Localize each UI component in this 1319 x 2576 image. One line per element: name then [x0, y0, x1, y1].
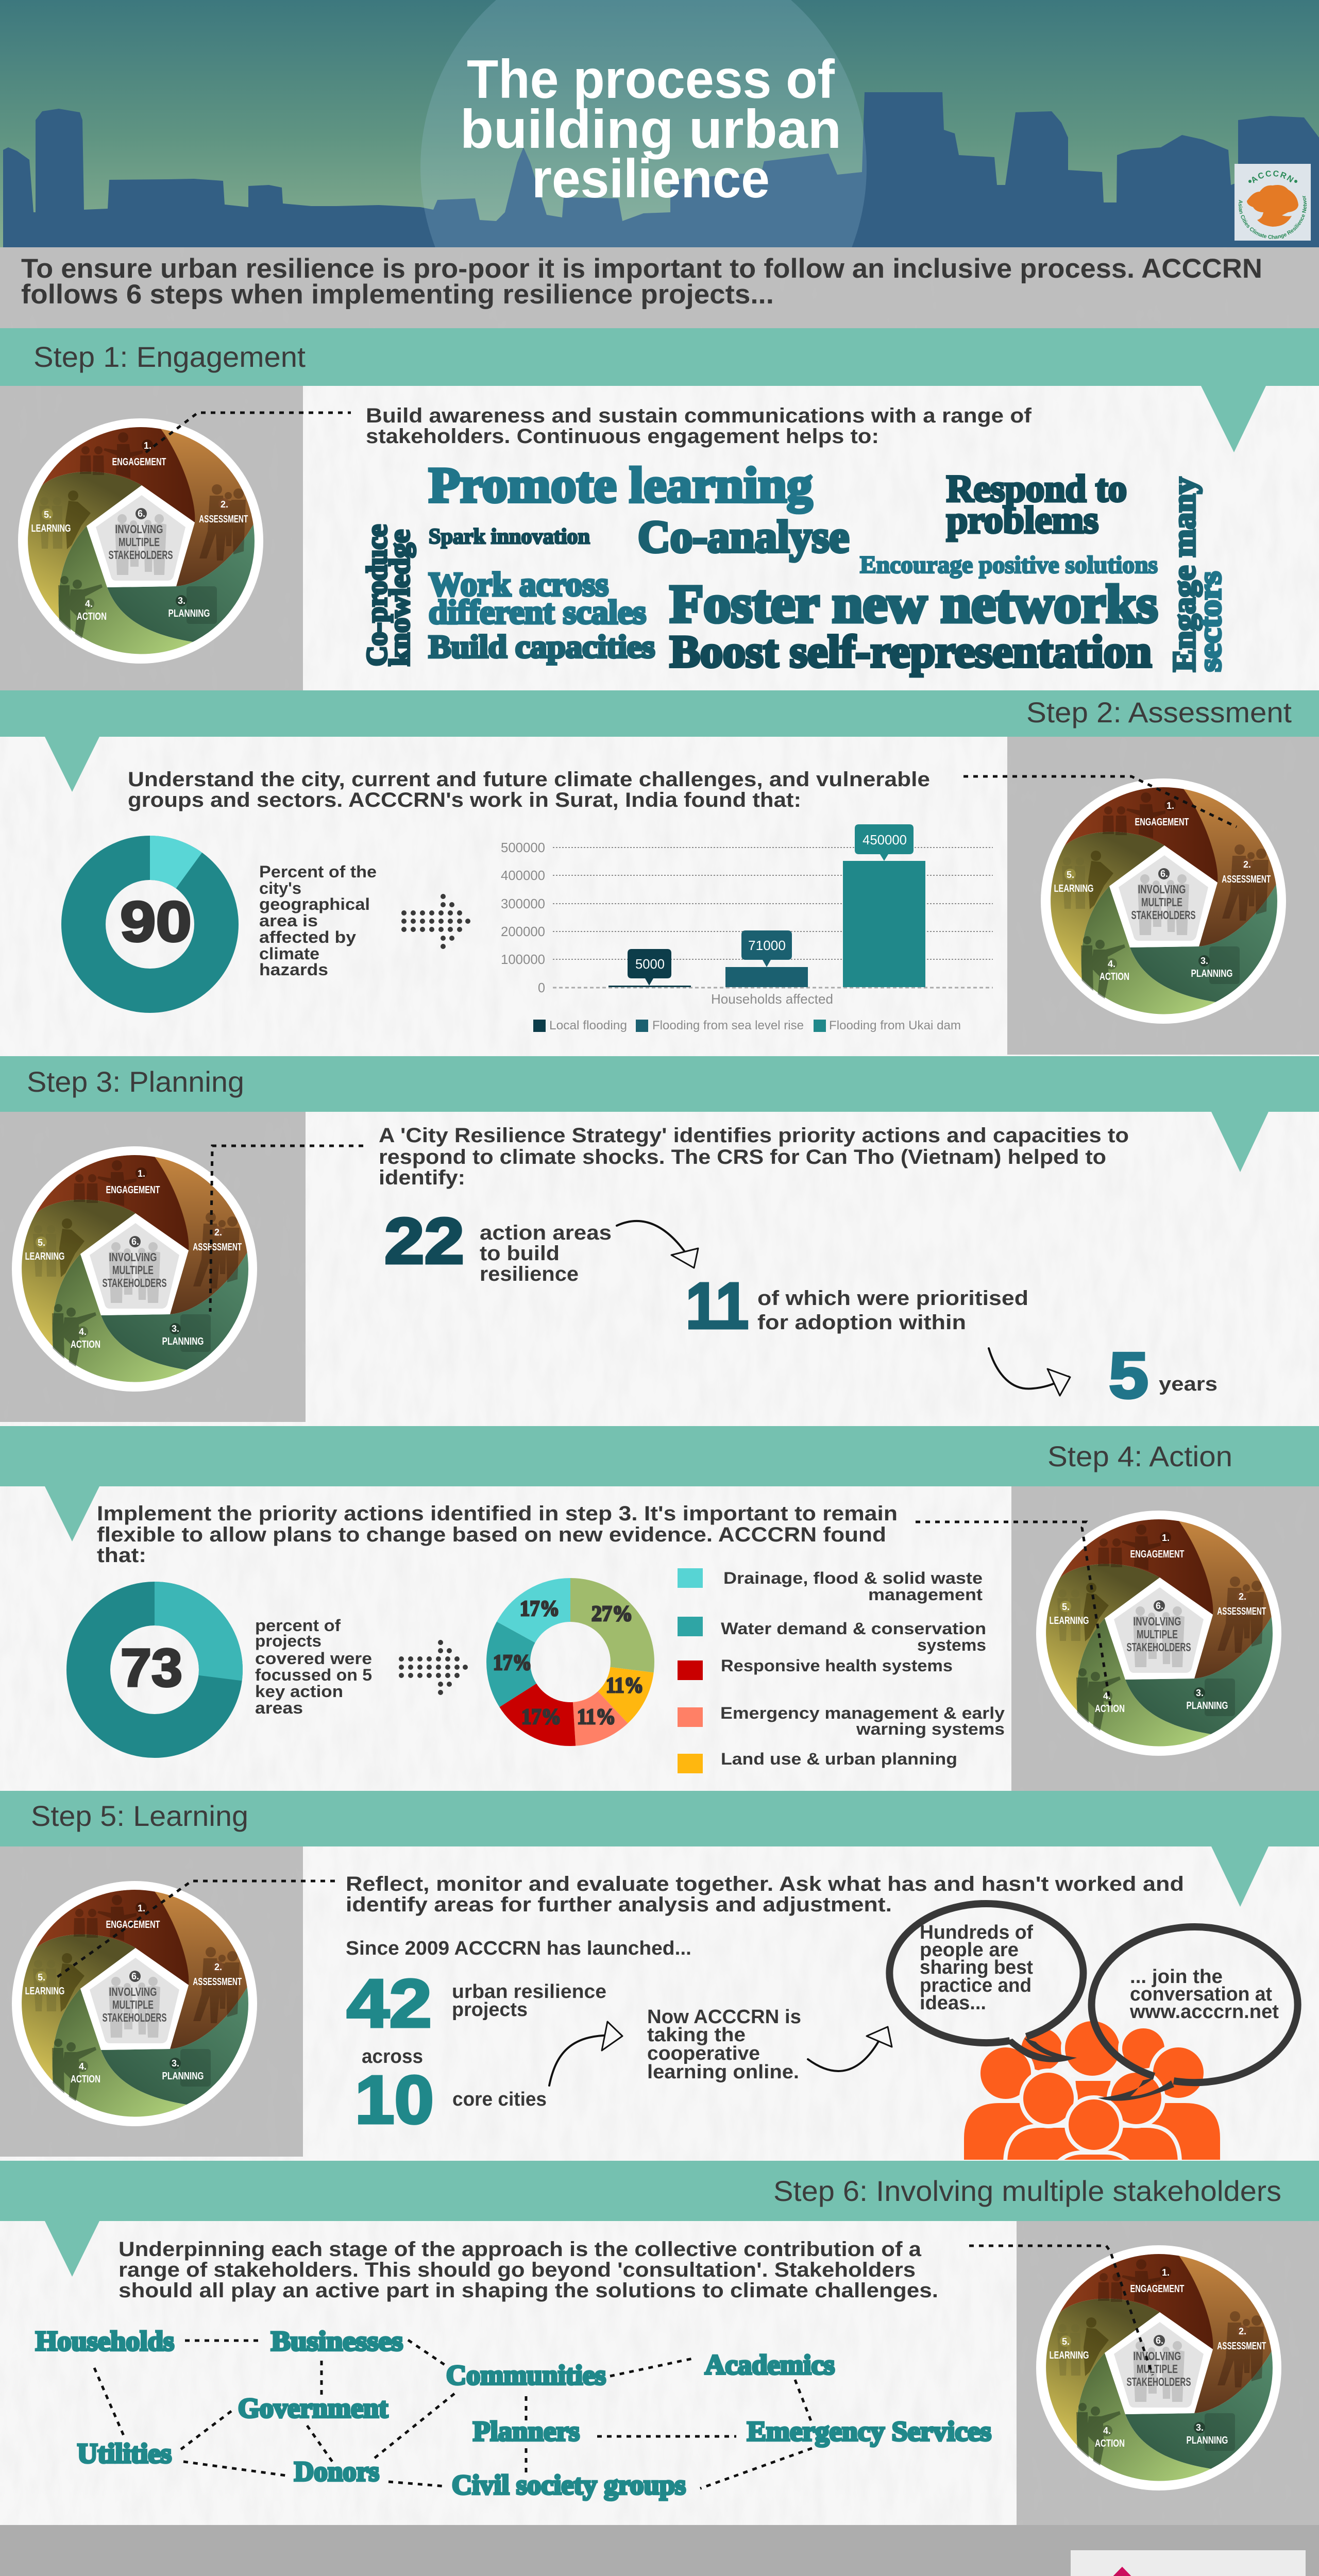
stakeholder labels: Households	[36, 2326, 174, 2357]
step 2 wheel: 5.	[1067, 870, 1074, 880]
step 3 description: identify:	[379, 1166, 465, 1189]
step 3 wheel: ACTION	[71, 1339, 100, 1350]
step 2 heading: Step 2: Assessment	[1026, 696, 1292, 728]
word cloud: problems	[946, 499, 1098, 541]
step 5 wheel: 6.	[131, 1971, 139, 1981]
donut legend: management	[868, 1585, 983, 1604]
step 2 description	[128, 768, 930, 811]
bar chart: households affected	[501, 824, 993, 1032]
speech bubble: join: conversation at	[1130, 1984, 1272, 2005]
step 6 wheel: ENGAGEMENT	[1130, 2283, 1184, 2295]
step 2 wheel: ACTION	[1100, 971, 1129, 982]
stat: 11 prioritised: 11	[686, 1269, 749, 1342]
word cloud: Boost self-representation	[670, 627, 1152, 677]
online learning text	[647, 2006, 801, 2083]
tooltip 71000: 71000	[748, 938, 786, 953]
step 6 wheel: 2.	[1239, 2326, 1246, 2336]
step 5 wheel: ACTION	[71, 2074, 100, 2085]
title: building urban	[460, 99, 841, 160]
step 6 wheel: MULTIPLE	[1137, 2362, 1178, 2376]
step 1 band	[0, 328, 1319, 386]
step 5 wheel: ENGAGEMENT	[106, 1919, 160, 1930]
stat: 10 core cities: core cities	[452, 2089, 547, 2110]
stat: 42 projects: urban resilience	[452, 1981, 606, 2003]
step 4 wheel: 5.	[1062, 1602, 1070, 1612]
step 1 wheel: 3.	[178, 596, 185, 606]
word cloud: Promote learning	[429, 457, 813, 513]
step 1 pointer	[1201, 386, 1266, 452]
tooltip 5000: 5000	[635, 956, 665, 972]
donut legend: Land use & urban planning	[721, 1750, 957, 1768]
word cloud: Spark innovation	[429, 525, 590, 549]
donut caption: hazards	[259, 960, 328, 979]
step 2 connector	[963, 776, 1237, 827]
donut caption: focussed on 5	[255, 1666, 372, 1684]
arrow: cities to online	[549, 2022, 622, 2086]
word cloud: Encourage positive solutions	[860, 551, 1158, 579]
chart legend: Flooding from Ukai dam	[829, 1019, 961, 1032]
logo: ACCCRN	[1235, 164, 1311, 241]
stat: 42 projects: projects	[452, 1999, 528, 2021]
step 2 wheel	[1041, 778, 1286, 1024]
step 3 wheel: 2.	[214, 1227, 222, 1238]
step 2 wheel: 3.	[1200, 956, 1208, 966]
bar: local flooding	[608, 986, 691, 987]
step 1 wheel: 5.	[44, 510, 52, 520]
stat: 42 projects	[347, 1965, 606, 2041]
step 4 wheel: ENGAGEMENT	[1130, 1549, 1184, 1560]
step 5 wheel: STAKEHOLDERS	[102, 2011, 167, 2024]
stat: 11 prioritised: of which were prioritised	[757, 1287, 1028, 1310]
step 5 pointer	[1211, 1846, 1269, 1907]
word cloud: sectors	[1193, 571, 1228, 672]
online learning text: Now ACCCRN is	[647, 2006, 801, 2028]
step 5 wheel	[12, 1881, 257, 2126]
step 6 description: range of stakeholders. This should go beyond 'consultation'. Stakeholders	[119, 2259, 916, 2281]
step 6 wheel: INVOLVING	[1134, 2349, 1181, 2363]
stakeholder labels: Emergency Services	[747, 2416, 991, 2447]
stat: 5 years: 5	[1109, 1339, 1148, 1412]
icon: dotted arrow	[401, 894, 470, 949]
step 1 wheel: 4.	[85, 599, 93, 609]
icon: orange crowd	[962, 2019, 1222, 2164]
step 3 description: A 'City Resilience Strategy' identifies priority actions and capacities to	[379, 1124, 1129, 1147]
step 4 wheel: 4.	[1103, 1691, 1111, 1701]
step 4 wheel: STAKEHOLDERS	[1126, 1640, 1191, 1654]
step 1 wheel: PLANNING	[168, 608, 210, 619]
step 1 description: stakeholders. Continuous engagement helps to:	[366, 425, 879, 448]
step 1 heading: Step 1: Engagement	[33, 341, 306, 373]
donut caption: climate	[259, 944, 319, 963]
donut caption: area is	[259, 911, 318, 930]
step 5 description: Reflect, monitor and evaluate together. Ask what has and hasn't worked and	[346, 1873, 1184, 1895]
step 4 description	[97, 1502, 898, 1567]
step 4 wheel: 3.	[1196, 1688, 1204, 1698]
stat: 42 projects: 42	[347, 1965, 432, 2041]
logo: ACCCRN: Asian Cities Climate Change Resilience Network	[1239, 196, 1307, 239]
bar chart: households affected: 500000	[501, 840, 545, 855]
word cloud	[361, 457, 1228, 677]
word cloud: knowledge	[384, 530, 416, 666]
step 6 wheel: ASSESSMENT	[1217, 2341, 1266, 2352]
panel: step 6 stakeholders	[0, 2161, 1319, 2500]
word cloud: Foster new networks	[670, 574, 1158, 634]
step 3 wheel: ASSESSMENT	[193, 1242, 242, 1253]
speech bubble: join	[1092, 1927, 1298, 2101]
donut caption: geographical	[259, 895, 370, 913]
stat: 10 core cities	[355, 2062, 547, 2138]
word cloud: Engage many	[1167, 477, 1202, 672]
speech bubble: sharing	[889, 1904, 1083, 2062]
step 6 wheel: STAKEHOLDERS	[1126, 2375, 1191, 2388]
step 6 description	[119, 2238, 938, 2302]
step 2 wheel: 6.	[1160, 869, 1168, 879]
word cloud: Work across	[429, 566, 608, 603]
step 1 connector	[146, 413, 351, 452]
tooltip 5000	[628, 949, 671, 986]
step 5 wheel: INVOLVING	[109, 1985, 157, 1998]
step 2 wheel: INVOLVING	[1138, 883, 1186, 896]
intro text: follows 6 steps when implementing resilience projects...	[21, 279, 774, 310]
step 4 pointer	[45, 1486, 99, 1541]
step 6 description: should all play an active part in shaping the solutions to climate challenges.	[119, 2279, 938, 2302]
step 4 wheel: 6.	[1156, 1601, 1163, 1611]
stakeholder labels: Donors	[294, 2456, 379, 2487]
skyline silhouette	[3, 92, 1319, 247]
word cloud: different scales	[429, 594, 646, 631]
stat: 11 prioritised	[686, 1269, 1028, 1342]
step 6 wheel	[1036, 2245, 1281, 2490]
step 2 wheel: 1.	[1166, 801, 1174, 811]
chart legend: Local flooding	[549, 1019, 627, 1032]
step 2 wheel: 2.	[1243, 859, 1251, 870]
bar: Ukai dam	[843, 861, 925, 987]
stat: 22 action areas	[384, 1205, 612, 1285]
stakeholder labels: Communities	[446, 2360, 606, 2391]
stakeholder labels	[36, 2326, 991, 2500]
bar: sea level rise	[725, 967, 808, 987]
step 4 wheel: ACTION	[1095, 1703, 1125, 1715]
step 6 wheel: LEARNING	[1049, 2350, 1089, 2361]
step 3 wheel	[12, 1146, 257, 1392]
stakeholder labels: Civil society groups	[452, 2469, 686, 2500]
online learning text: cooperative	[647, 2043, 760, 2064]
donut caption: affected by	[259, 928, 356, 946]
step 1 wheel: MULTIPLE	[119, 535, 160, 549]
donut: action areas: 27%	[591, 1602, 633, 1626]
donut: action areas: 11%	[577, 1705, 616, 1729]
step 2 description: Understand the city, current and future climate challenges, and vulnerable	[128, 768, 930, 791]
stat: 22 action areas: to build	[480, 1242, 560, 1265]
speech bubble: sharing: ideas...	[920, 1992, 986, 2014]
donut caption: city's	[259, 879, 301, 897]
step 3 wheel: 6.	[131, 1236, 139, 1247]
step 6 heading: Step 6: Involving multiple stakeholders	[773, 2175, 1281, 2207]
step 6 description: Underpinning each stage of the approach is the collective contribution of a	[119, 2238, 922, 2261]
stakeholder labels: Utilities	[77, 2438, 172, 2469]
bar chart: households affected: 0	[538, 980, 545, 995]
donut legend: systems	[917, 1636, 986, 1654]
step 4 wheel: PLANNING	[1186, 1700, 1228, 1711]
step 6 wheel: 3.	[1196, 2422, 1204, 2433]
step 1 wheel: STAKEHOLDERS	[108, 548, 173, 562]
panel: step 4 action	[0, 1426, 1319, 1773]
step 5 description	[346, 1873, 1184, 1916]
step 3 band	[0, 1056, 1319, 1112]
word cloud: Respond to	[946, 468, 1127, 510]
step 1 wheel: INVOLVING	[115, 522, 163, 536]
step 2 wheel: MULTIPLE	[1141, 895, 1182, 909]
donut caption	[259, 862, 377, 979]
stakeholder network links	[94, 2340, 812, 2488]
speech bubble: sharing: sharing best	[920, 1957, 1033, 1978]
donut caption: Percent of the	[259, 862, 377, 881]
step 3 wheel: INVOLVING	[109, 1250, 157, 1264]
donut: action areas: 11%	[606, 1674, 644, 1698]
step 1 wheel	[18, 418, 263, 664]
donut caption	[255, 1616, 372, 1717]
step 2 wheel: STAKEHOLDERS	[1131, 908, 1195, 922]
step 2 wheel: LEARNING	[1054, 883, 1093, 894]
step 3 description: respond to climate shocks. The CRS for Can Tho (Vietnam) helped to	[379, 1146, 1106, 1168]
donut: action areas: 17%	[520, 1597, 560, 1621]
step 3 wheel: 1.	[138, 1168, 145, 1179]
stat: 22 action areas: action areas	[480, 1222, 612, 1244]
step 4 description: flexible to allow plans to change based on new evidence. ACCCRN found	[97, 1523, 886, 1546]
online learning text: learning online.	[647, 2061, 799, 2083]
stat: 5 years	[1109, 1339, 1217, 1412]
donut caption: covered were	[255, 1649, 372, 1668]
title: The process of	[467, 49, 835, 110]
donut: action areas: 17%	[493, 1651, 532, 1675]
step 6 band	[0, 2161, 1319, 2221]
step 1 wheel: ENGAGEMENT	[112, 456, 166, 468]
step 1 wheel: 6.	[138, 509, 145, 519]
donut: action areas: 17%	[521, 1705, 561, 1729]
speech bubble: join: ... join the	[1130, 1966, 1223, 1988]
step 1 wheel: ASSESSMENT	[199, 514, 248, 525]
intro text: To ensure urban resilience is pro-poor it is important to follow an inclusive process. ACCCRN	[21, 253, 1262, 284]
step 2 band	[0, 690, 1319, 737]
word cloud: Build capacities	[429, 630, 655, 665]
step 4 wheel: 1.	[1162, 1533, 1170, 1543]
step 4 wheel: MULTIPLE	[1137, 1628, 1178, 1641]
step 6 wheel: 6.	[1156, 2335, 1163, 2346]
bar chart: households affected: 100000	[501, 952, 545, 967]
donut legend: Water demand & conservation	[721, 1619, 986, 1638]
arrow: online to crowd	[808, 2027, 892, 2071]
step 3 wheel: 5.	[38, 1238, 45, 1248]
step 1 wheel: 2.	[221, 499, 228, 510]
donut caption: key action	[255, 1682, 343, 1701]
step 4 description: Implement the priority actions identified in step 3. It's important to remain	[97, 1502, 898, 1525]
step 1 description	[366, 404, 1032, 448]
bar chart: households affected: 200000	[501, 924, 545, 939]
bar chart: households affected: 400000	[501, 868, 545, 883]
step 3 heading: Step 3: Planning	[27, 1065, 244, 1098]
tooltip 450000: 450000	[863, 832, 907, 848]
arrow: 11 to 5	[989, 1348, 1070, 1396]
step 5 description: identify areas for further analysis and adjustment.	[346, 1893, 892, 1916]
step 1 wheel: ACTION	[77, 611, 107, 622]
step 2 description: groups and sectors. ACCCRN's work in Surat, India found that:	[128, 789, 801, 811]
donut caption: areas	[255, 1699, 303, 1717]
step 3 wheel: PLANNING	[162, 1336, 204, 1347]
step 3 wheel: MULTIPLE	[112, 1263, 154, 1277]
step 4 heading: Step 4: Action	[1047, 1440, 1232, 1472]
donut legend: Responsive health systems	[721, 1656, 953, 1675]
step 5 wheel: ASSESSMENT	[193, 1976, 242, 1988]
speech bubble: sharing: people are	[920, 1939, 1019, 1961]
bar chart: households affected: 300000	[501, 896, 545, 911]
step 6 wheel: ACTION	[1095, 2438, 1125, 2449]
step 5 wheel: 4.	[79, 2061, 87, 2072]
tooltip 71000	[741, 930, 792, 967]
step 1 wheel: 1.	[144, 440, 151, 451]
step 6 wheel: PLANNING	[1186, 2435, 1228, 2446]
donut: action areas	[493, 1597, 644, 1729]
panel: step 1 engagement	[0, 328, 1319, 677]
donut legend: warning systems	[856, 1720, 1005, 1738]
step 6 wheel: 4.	[1103, 2426, 1111, 2436]
tooltip 450000	[855, 824, 914, 861]
donut legend: Drainage, flood & solid waste	[723, 1569, 983, 1587]
step 4 wheel	[1036, 1511, 1281, 1756]
step 6 pointer	[45, 2221, 99, 2277]
chart legend	[533, 1019, 961, 1032]
step 3 wheel: LEARNING	[25, 1251, 65, 1262]
word cloud: Co-produce	[361, 524, 393, 666]
step 4 connector	[916, 1522, 1110, 1706]
step 4 wheel: ASSESSMENT	[1217, 1606, 1266, 1617]
icon: dotted arrow	[399, 1640, 468, 1695]
speech bubble: join: www.acccrn.net	[1129, 2001, 1279, 2023]
stat: 22 action areas: resilience	[480, 1263, 579, 1285]
stat: 11 prioritised: for adoption within	[757, 1311, 966, 1334]
header: skyline hero	[0, 0, 1319, 247]
stakeholder labels: Government	[238, 2393, 388, 2424]
step 2 wheel: PLANNING	[1191, 968, 1232, 979]
step 6 wheel: 5.	[1062, 2336, 1070, 2347]
step 3 wheel: STAKEHOLDERS	[102, 1276, 167, 1290]
logo: Acclimatise	[1071, 2550, 1306, 2576]
step 1 wheel: LEARNING	[31, 523, 71, 534]
across label: across	[362, 2046, 423, 2067]
arrow: 22 to 11	[617, 1221, 698, 1268]
title: resilience	[532, 148, 770, 209]
stat: 5 years: years	[1159, 1374, 1217, 1395]
step 4 description: that:	[97, 1544, 146, 1567]
step 3 wheel: 3.	[172, 1324, 179, 1334]
step 5 heading: Step 5: Learning	[31, 1800, 248, 1832]
step 4 wheel: 2.	[1239, 1591, 1246, 1602]
stakeholder labels: Academics	[705, 2349, 835, 2380]
step 5 wheel: 5.	[38, 1972, 45, 1982]
panel: step 3 planning	[0, 1056, 1319, 1412]
panel: step 5 learning	[0, 1791, 1319, 2164]
step 5 wheel: 3.	[172, 2058, 179, 2069]
step 3 description	[379, 1124, 1129, 1189]
speech bubble: sharing: Hundreds of	[920, 1922, 1033, 1943]
step 2 wheel: ASSESSMENT	[1222, 874, 1271, 885]
step 4 band	[0, 1426, 1319, 1486]
donut: 90 percent: 90	[120, 890, 192, 954]
step 6 wheel: 1.	[1162, 2267, 1170, 2278]
step 4 wheel: INVOLVING	[1134, 1615, 1181, 1628]
word cloud: Co-analyse	[638, 512, 849, 562]
chart legend: Flooding from sea level rise	[652, 1019, 804, 1032]
speech bubble: sharing: practice and	[920, 1975, 1031, 1996]
step 3 wheel: ENGAGEMENT	[106, 1184, 160, 1196]
step 5 wheel: LEARNING	[25, 1986, 65, 1997]
step 3 connector	[210, 1146, 363, 1312]
step 2 pointer	[45, 737, 99, 792]
title	[460, 49, 841, 209]
donut: 73 percent	[89, 1603, 221, 1736]
donut: 73 percent: 73	[121, 1638, 182, 1698]
stakeholder labels: Planners	[473, 2416, 580, 2447]
panel: step 2 assessment	[0, 690, 1319, 1032]
intro text	[21, 253, 1262, 310]
stat: 10 core cities: 10	[355, 2062, 434, 2138]
online learning text: taking the	[647, 2024, 746, 2046]
step 2 wheel: 4.	[1108, 959, 1115, 969]
step 5 wheel: MULTIPLE	[112, 1998, 154, 2011]
step 6 connector	[969, 2246, 1153, 2375]
logo: ACCCRN: ACCCRN	[1252, 171, 1294, 183]
stat: 22 action areas: 22	[384, 1205, 464, 1277]
step 2 wheel: ENGAGEMENT	[1135, 817, 1189, 828]
step 3 wheel: 4.	[79, 1327, 87, 1337]
axis title: Households affected	[711, 991, 833, 1007]
donut caption: projects	[255, 1632, 322, 1650]
step 1 description: Build awareness and sustain communications with a range of	[366, 404, 1032, 427]
step 5 wheel: 2.	[214, 1962, 222, 1972]
stakeholder labels: Businesses	[271, 2326, 403, 2357]
step 5 wheel: 1.	[138, 1903, 145, 1913]
step 5 connector	[55, 1881, 335, 1979]
step 5 wheel: PLANNING	[162, 2071, 204, 2082]
since 2009 text: Since 2009 ACCCRN has launched...	[346, 1938, 691, 1959]
donut: 90 percent	[83, 858, 216, 991]
step 5 band	[0, 1791, 1319, 1846]
donut caption: percent of	[255, 1616, 341, 1635]
donut legend: Emergency management & early	[720, 1704, 1005, 1722]
donut legend	[678, 1568, 1005, 1773]
step 3 pointer	[1211, 1112, 1269, 1172]
step 4 wheel: LEARNING	[1049, 1615, 1089, 1626]
